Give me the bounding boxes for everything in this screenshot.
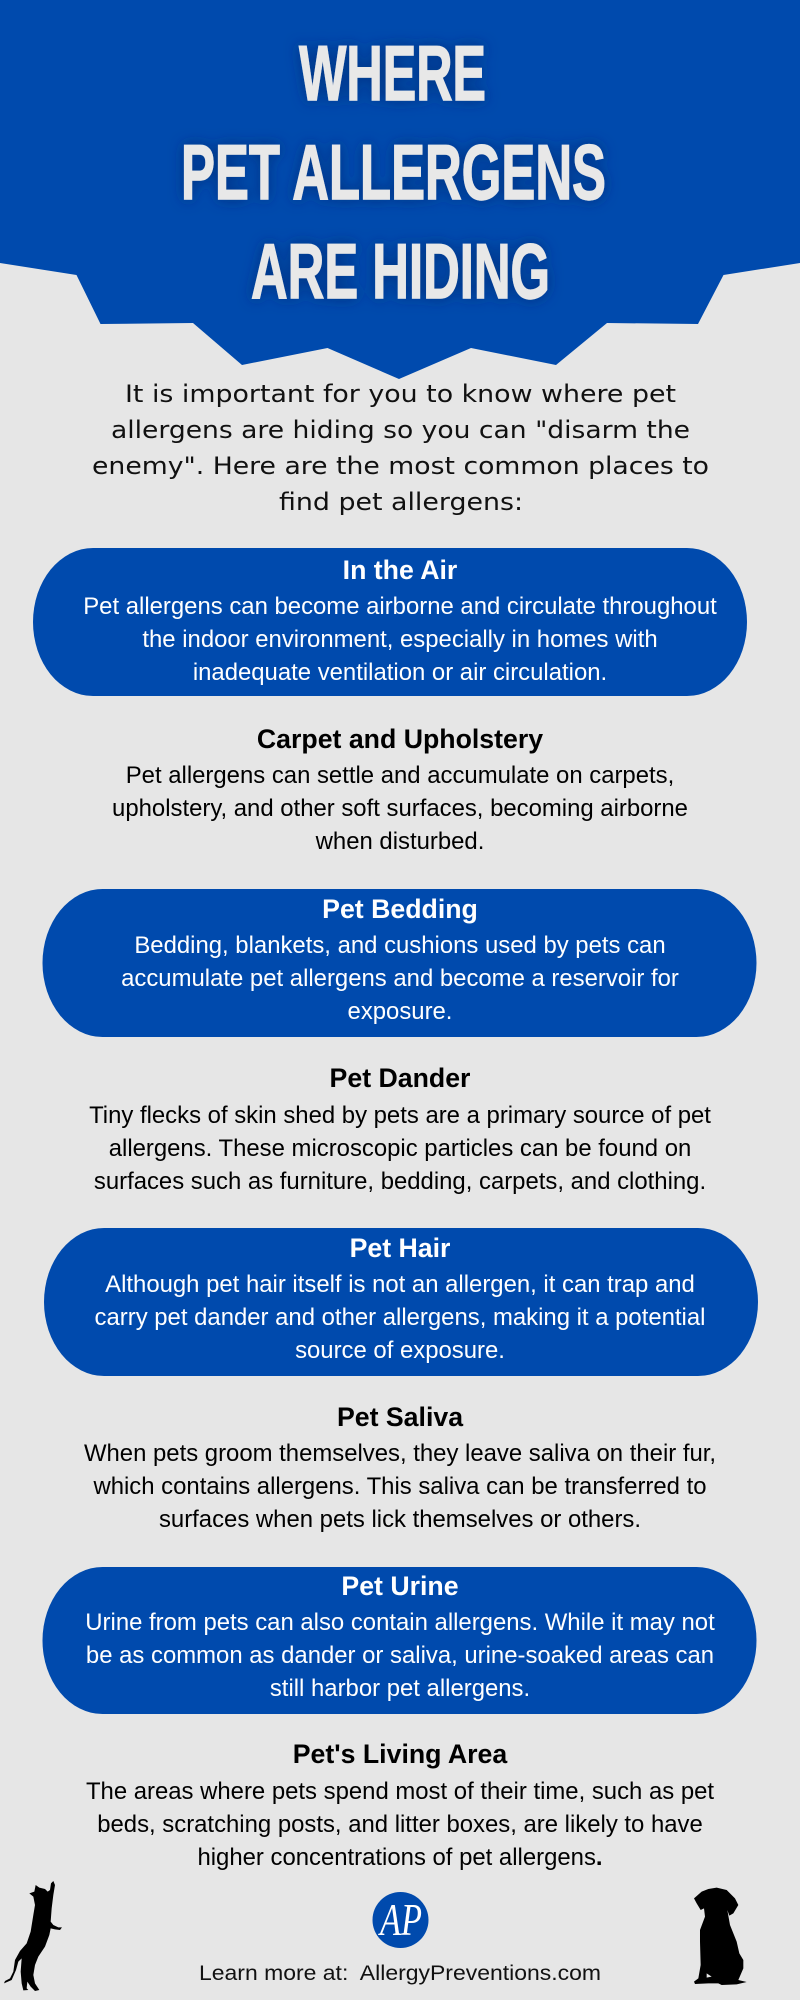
panel: Pet Dander: allergens. These microscopic particles can be found on xyxy=(109,1135,691,1162)
panel: Pet's Living Area xyxy=(86,1739,714,1871)
panel: Carpet and Upholstery xyxy=(112,724,688,855)
panel: Pet Saliva: surfaces when pets lick themselves or others. xyxy=(159,1506,641,1533)
panel: Pet Hair: carry pet dander and other allergens, making it a potential xyxy=(95,1304,705,1331)
intro text xyxy=(92,380,709,516)
footer link text: Learn more at: AllergyPreventions.com xyxy=(199,1962,601,1985)
logo: AP circle: AP xyxy=(378,1894,422,1945)
title: ARE HIDING xyxy=(251,227,550,315)
panel: Pet's Living Area: Pet's Living Area xyxy=(293,1739,508,1769)
panel: Pet's Living Area: higher concentrations of pet allergens. xyxy=(197,1844,603,1871)
panel: Pet's Living Area: The areas where pets spend most of their time, such as pet xyxy=(86,1778,714,1805)
panel: Pet Hair xyxy=(44,1228,758,1376)
panel: Pet Bedding: accumulate pet allergens and become a reservoir for xyxy=(121,965,679,992)
panel: Carpet and Upholstery: upholstery, and other soft surfaces, becoming airborne xyxy=(112,795,688,822)
panel: Pet Saliva: When pets groom themselves, they leave saliva on their fur, xyxy=(84,1440,716,1467)
panel: Pet Urine: be as common as dander or saliva, urine-soaked areas can xyxy=(86,1642,714,1669)
panel: Pet Urine xyxy=(42,1567,756,1714)
panel: Pet Bedding: exposure. xyxy=(348,998,452,1025)
panel: Pet Urine: still harbor pet allergens. xyxy=(270,1675,530,1702)
panel: Pet Bedding: Bedding, blankets, and cushions used by pets can xyxy=(134,932,666,959)
panel: Carpet and Upholstery: when disturbed. xyxy=(315,828,484,855)
panel: In the Air: the indoor environment, especially in homes with xyxy=(142,626,658,653)
panel: Pet Bedding: Pet Bedding xyxy=(322,894,478,924)
panel: Pet Saliva xyxy=(84,1402,716,1533)
icon: dog silhouette xyxy=(694,1888,747,1985)
intro text: find pet allergens: xyxy=(279,488,523,516)
panel: In the Air: In the Air xyxy=(343,555,457,585)
header banner xyxy=(0,0,800,379)
panel: Pet Dander xyxy=(89,1063,711,1195)
intro text: It is important for you to know where pet xyxy=(125,380,676,408)
panel: Pet Bedding xyxy=(42,889,756,1037)
title xyxy=(181,29,606,315)
title: WHERE xyxy=(299,29,486,117)
intro text: allergens are hiding so you can "disarm the xyxy=(111,416,690,444)
panel: Pet Hair: Pet Hair xyxy=(350,1233,450,1263)
panel: Pet Hair: source of exposure. xyxy=(295,1337,505,1364)
panel: Pet Dander: Tiny flecks of skin shed by pets are a primary source of pet xyxy=(89,1102,711,1129)
intro text: enemy". Here are the most common places to xyxy=(92,452,709,480)
panel: In the Air: inadequate ventilation or air circulation. xyxy=(193,659,607,686)
panel: Pet's Living Area: beds, scratching posts, and litter boxes, are likely to have xyxy=(97,1811,703,1838)
panel: Pet Dander: Pet Dander xyxy=(330,1063,470,1093)
panel: Pet Saliva: which contains allergens. This saliva can be transferred to xyxy=(92,1473,707,1500)
panel: Pet Hair: Although pet hair itself is not an allergen, it can trap and xyxy=(105,1271,695,1298)
panel: Carpet and Upholstery: Pet allergens can settle and accumulate on carpets, xyxy=(126,762,674,789)
panel: Pet Urine: Pet Urine xyxy=(341,1571,459,1601)
panel: In the Air xyxy=(33,548,747,696)
panel: Pet Saliva: Pet Saliva xyxy=(337,1402,464,1432)
panel: Pet Dander: surfaces such as furniture, bedding, carpets, and clothing. xyxy=(94,1168,706,1195)
panel: Carpet and Upholstery: Carpet and Upholstery xyxy=(257,724,543,754)
icon: cat silhouette xyxy=(4,1881,62,1991)
panel: Pet Urine: Urine from pets can also contain allergens. While it may not xyxy=(85,1609,715,1636)
panel: In the Air: Pet allergens can become airborne and circulate throughout xyxy=(83,593,717,620)
